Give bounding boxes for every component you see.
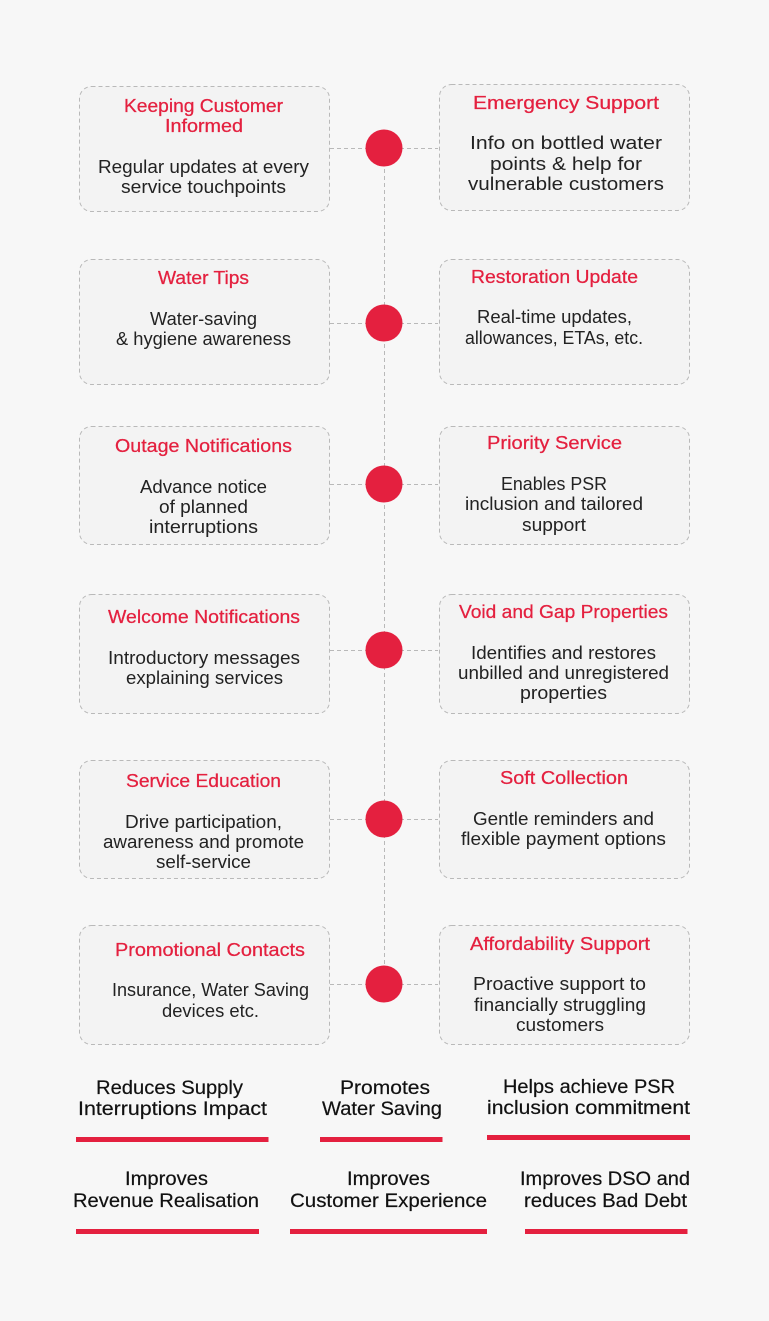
outcome: Reduces Supply Interruptions Impact <box>76 1078 268 1142</box>
panel: Promotional Contacts <box>80 926 330 1044</box>
text block <box>116 309 291 349</box>
heading: Soft Collection <box>500 768 628 788</box>
text block: interruptions <box>149 517 258 537</box>
text block: allowances, ETAs, etc. <box>465 328 643 348</box>
text block: points & help for <box>490 154 642 174</box>
text block: Gentle reminders and <box>473 809 654 829</box>
text block: customers <box>516 1015 604 1035</box>
text block: Drive participation, <box>125 812 282 832</box>
panel: Outage Notifications <box>80 426 330 544</box>
text block: Real-time updates, <box>477 307 632 327</box>
text block: & hygiene awareness <box>116 329 291 349</box>
text block: properties <box>520 683 607 703</box>
heading: Informed <box>165 116 243 136</box>
text block: awareness and promote <box>103 832 304 852</box>
text block <box>103 812 304 872</box>
text block <box>468 133 664 194</box>
heading: Affordability Support <box>470 934 650 954</box>
outcome: Improves Customer Experience: Customer Experience <box>290 1191 487 1212</box>
heading: Service Education <box>126 771 281 791</box>
outcome: Promotes Water Saving: Promotes <box>340 1078 430 1099</box>
panel: Welcome Notifications <box>80 594 330 714</box>
text block: devices etc. <box>162 1001 259 1021</box>
outcome: Improves DSO and reduces Bad Debt <box>520 1169 690 1234</box>
text block: Identifies and restores <box>471 643 656 663</box>
text block: support <box>522 515 586 535</box>
text block: Water-saving <box>150 309 257 329</box>
text block <box>465 474 643 535</box>
heading: Emergency Support <box>473 93 659 113</box>
text block <box>98 157 309 197</box>
text block <box>458 643 669 703</box>
outcome: Helps achieve PSR inclusion commitment: Helps achieve PSR <box>503 1077 675 1098</box>
text block: Introductory messages <box>108 648 300 668</box>
text block: Insurance, Water Saving <box>112 980 309 1000</box>
panel: Water Tips <box>80 260 330 384</box>
heading: Outage Notifications <box>115 436 292 456</box>
panel: Restoration Update <box>440 260 690 384</box>
text block <box>461 809 666 849</box>
outcome: Helps achieve PSR inclusion commitment: inclusion commitment <box>487 1098 691 1119</box>
panel: Affordability Support <box>440 926 690 1044</box>
text block <box>140 477 267 537</box>
text block <box>112 980 309 1021</box>
outcome: Improves Revenue Realisation: Improves <box>125 1169 208 1190</box>
outcome: Improves Revenue Realisation: Revenue Realisation <box>73 1191 259 1212</box>
text block: Advance notice <box>140 477 267 497</box>
text block: of planned <box>159 497 248 517</box>
heading <box>124 96 283 136</box>
text block: explaining services <box>126 668 283 688</box>
heading: Void and Gap Properties <box>459 602 668 622</box>
outcome: Improves DSO and reduces Bad Debt: reduces Bad Debt <box>524 1191 688 1212</box>
outcome: Improves DSO and reduces Bad Debt: Improves DSO and <box>520 1169 690 1190</box>
outcome: Improves Customer Experience: Improves <box>347 1169 430 1190</box>
heading: Keeping Customer <box>124 96 283 116</box>
text block: Enables PSR <box>501 474 607 494</box>
outcome: Helps achieve PSR inclusion commitment <box>487 1077 691 1140</box>
heading: Promotional Contacts <box>115 940 305 960</box>
text block: vulnerable customers <box>468 174 664 194</box>
outcome: Improves Customer Experience <box>290 1169 487 1234</box>
outcome: Promotes Water Saving <box>320 1078 442 1142</box>
outcome: Reduces Supply Interruptions Impact: Interruptions Impact <box>78 1099 268 1120</box>
text block <box>465 307 643 348</box>
text block: Info on bottled water <box>470 133 662 153</box>
panel: Soft Collection <box>440 760 690 878</box>
text block: self-service <box>156 852 251 872</box>
text block <box>108 648 300 688</box>
text block <box>473 974 646 1035</box>
panel: Emergency Support <box>440 84 690 210</box>
outcome: Reduces Supply Interruptions Impact: Reduces Supply <box>96 1078 244 1099</box>
outcome: Improves Revenue Realisation <box>73 1169 259 1234</box>
panel: Void and Gap Properties <box>440 594 690 714</box>
panel: Service Education <box>80 760 330 878</box>
text block: Regular updates at every <box>98 157 309 177</box>
text block: unbilled and unregistered <box>458 663 669 683</box>
timeline nodes <box>366 130 402 1002</box>
heading: Restoration Update <box>471 267 638 287</box>
outcome: Promotes Water Saving: Water Saving <box>322 1099 442 1120</box>
text block: flexible payment options <box>461 829 666 849</box>
text block: Proactive support to <box>473 974 646 994</box>
text block: inclusion and tailored <box>465 494 643 514</box>
panel: Keeping Customer Informed <box>80 86 330 212</box>
heading: Priority Service <box>487 433 622 453</box>
text block: service touchpoints <box>121 177 286 197</box>
panel: Priority Service <box>440 426 690 544</box>
text block: financially struggling <box>474 995 646 1015</box>
heading: Welcome Notifications <box>108 607 300 627</box>
heading: Water Tips <box>158 268 249 288</box>
